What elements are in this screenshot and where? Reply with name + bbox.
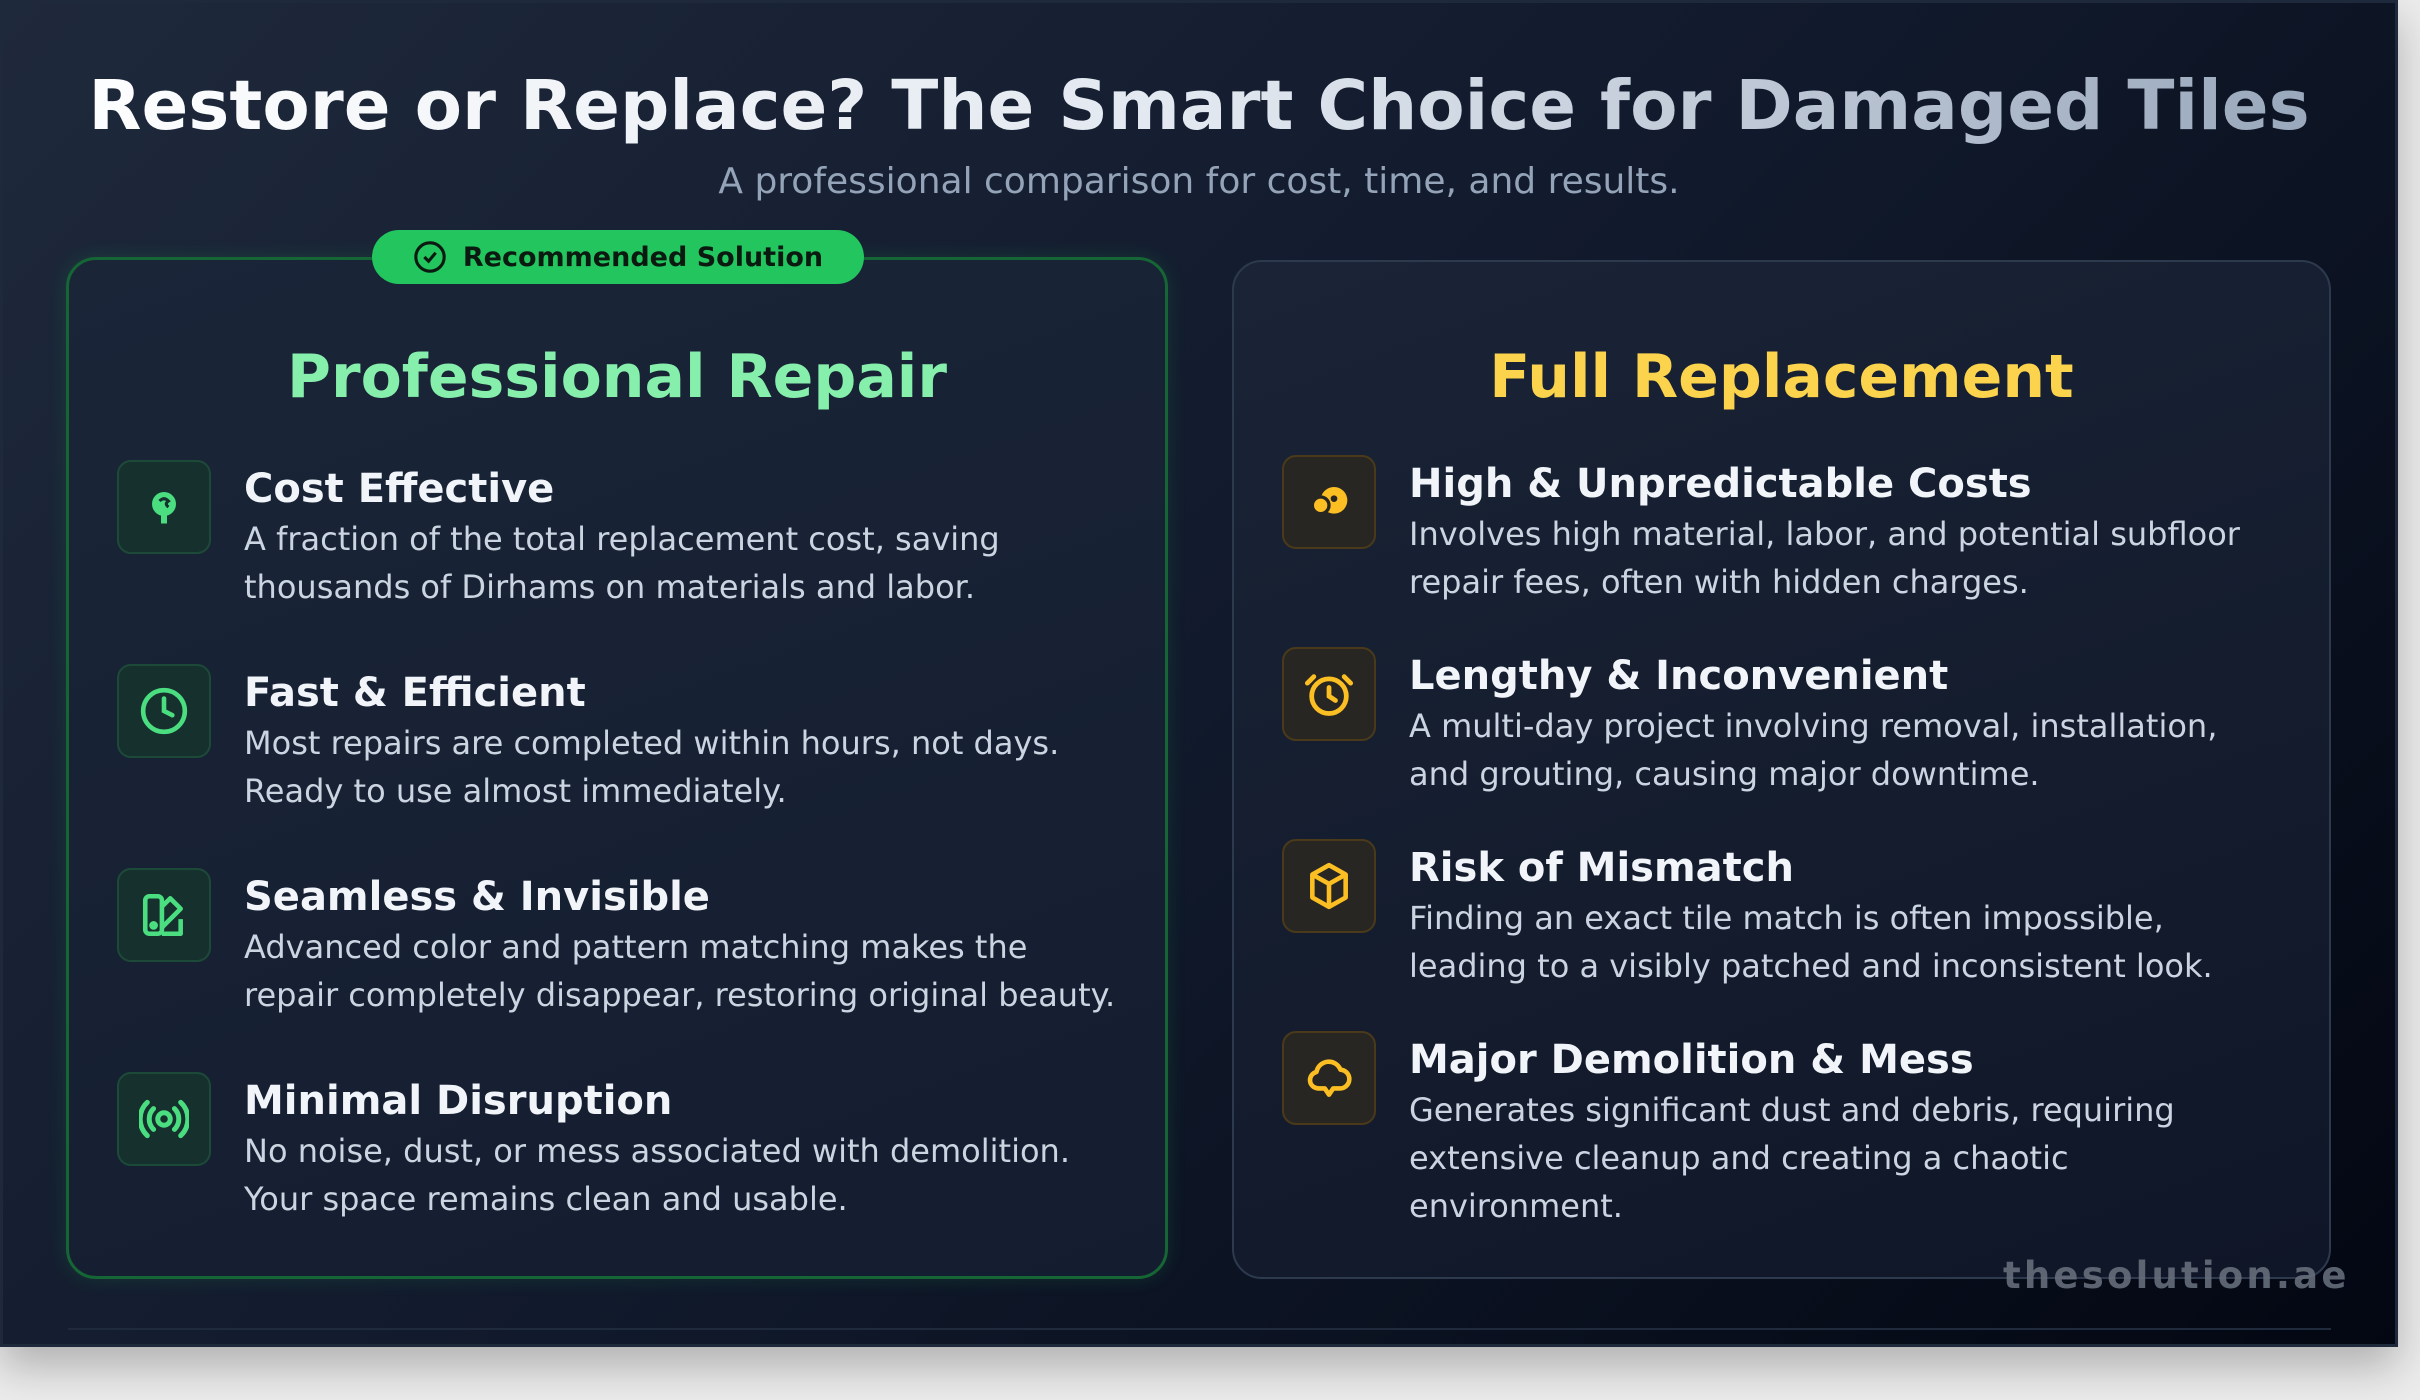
panel: professional repair: Minimal Disruption [244,1078,672,1124]
panel: full replacement [1232,260,2331,1279]
panel: full replacement: Risk of Mismatch [1409,845,1794,891]
item: fast & efficient [117,664,1059,810]
panel: professional repair: thousands of Dirhams on materials and labor. [244,568,975,606]
panel: full replacement: extensive cleanup and creating a chaotic [1409,1139,2069,1177]
icon: swatch [117,868,211,962]
panel: full replacement: and grouting, causing major downtime. [1409,755,2040,793]
panel: professional repair: Your space remains clean and usable. [244,1180,848,1218]
panel: professional repair: Cost Effective [244,466,554,512]
panel: full replacement: Generates significant dust and debris, requiring [1409,1091,2175,1129]
panel: professional repair: No noise, dust, or mess associated with demolition. [244,1132,1070,1170]
panel: professional repair: Ready to use almost immediately. [244,772,787,810]
watermark: thesolution.ae [2003,1254,2350,1297]
icon: box [1282,839,1376,933]
item: seamless & invisible [117,868,1115,1014]
panel: full replacement: leading to a visibly patched and inconsistent look. [1409,947,2213,985]
icon: clock [117,664,211,758]
subtitle: A professional comparison for cost, time, and results. [718,161,1680,202]
panel: full replacement: Major Demolition & Mess [1409,1037,1974,1083]
panel: professional repair: Seamless & Invisible [244,874,710,920]
panel: professional repair: Advanced color and pattern matching makes the [244,928,1027,966]
panel: full replacement: Lengthy & Inconvenient [1409,653,1948,699]
panel: professional repair [66,257,1168,1279]
icon: broadcast [117,1072,211,1166]
icon: coin [117,460,211,554]
panel: full replacement: environment. [1409,1187,1623,1225]
panel: full replacement: High & Unpredictable Costs [1409,461,2032,507]
title: Restore or Replace? The Smart Choice for Damaged Tiles [88,66,2310,146]
item: cost effective [117,460,1000,606]
item: demolition [1282,1031,2175,1225]
panel: full replacement: repair fees, often with hidden charges. [1409,563,2029,601]
icon: coins [1282,455,1376,549]
panel: professional repair: repair completely disappear, restoring original beauty. [244,976,1115,1014]
panel: professional repair: A fraction of the total replacement cost, saving [244,520,1000,558]
panel heading: professional repair: Professional Repair [287,342,947,412]
panel: professional repair: Fast & Efficient [244,670,586,716]
item: mismatch [1282,839,2213,985]
item: high costs [1282,455,2240,601]
panel heading: full replacement: Full Replacement [1489,342,2074,412]
icon: cloud [1282,1031,1376,1125]
icon: timer [1282,647,1376,741]
panel: full replacement: Finding an exact tile match is often impossible, [1409,899,2164,937]
item: minimal disruption [117,1072,1070,1218]
badge: recommended solution [372,230,864,284]
badge: recommended solution: Recommended Solution [463,242,823,272]
panel: full replacement: Involves high material, labor, and potential subfloor [1409,515,2240,553]
panel: full replacement: A multi-day project involving removal, installation, [1409,707,2217,745]
panel: professional repair: Most repairs are completed within hours, not days. [244,724,1059,762]
item: lengthy [1282,647,2217,793]
